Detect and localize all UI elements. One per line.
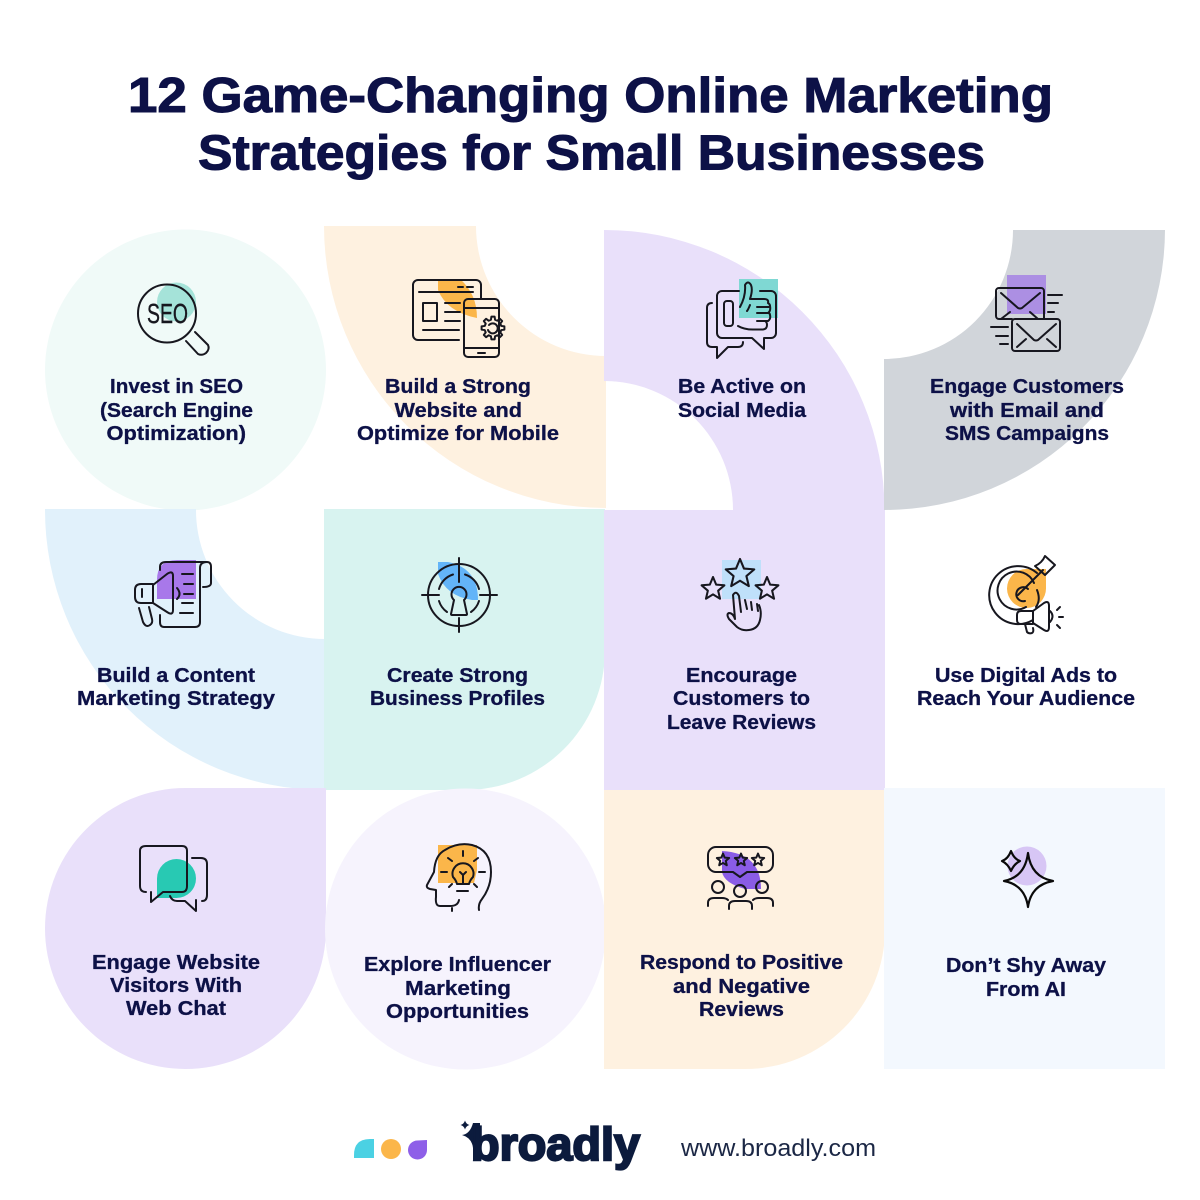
heading: Respond to Reviews: Reviews bbox=[699, 999, 784, 1021]
heading: Be Active on Social Media: Be Active on bbox=[678, 376, 806, 398]
heading: Engage Customers: Engage Customers bbox=[930, 376, 1124, 398]
heading: Build a Strong Website: Website and bbox=[394, 400, 522, 422]
heading: Encourage Customers: Customers to bbox=[673, 688, 810, 710]
heading: Engage Website bbox=[92, 952, 260, 1020]
footer: website url: www.broadly.com bbox=[680, 1135, 876, 1162]
heading: Engage Customers: SMS Campaigns bbox=[945, 423, 1109, 445]
heading: Engage Website: Web Chat bbox=[126, 998, 226, 1020]
heading: Respond to Reviews bbox=[640, 952, 843, 1021]
heading: Build a Strong Website bbox=[357, 376, 559, 445]
heading: Engage Website: Engage Website bbox=[92, 952, 260, 974]
heading: Invest in SEO: (Search Engine bbox=[100, 400, 253, 422]
panel: Be Active on Social Media bbox=[604, 230, 884, 510]
heading: Use Digital Ads: Use Digital Ads to bbox=[935, 665, 1117, 687]
title bbox=[128, 68, 1053, 180]
heading: Encourage Customers: Leave Reviews bbox=[667, 712, 816, 734]
heading: Explore Influencer: Explore Influencer bbox=[364, 954, 551, 976]
title: Strategies for Small Businesses bbox=[198, 126, 985, 180]
heading: Don't Shy Away bbox=[946, 955, 1107, 1001]
icon: keyhole target bbox=[422, 558, 497, 632]
icon: social thumbs up bbox=[707, 279, 778, 358]
icon: website and mobile bbox=[413, 279, 504, 357]
panel: Invest in SEO bbox=[45, 230, 326, 510]
heading: Build a Strong Website: Build a Strong bbox=[385, 376, 531, 398]
heading: Create Strong: Business Profiles bbox=[370, 688, 545, 710]
heading: Encourage Customers bbox=[667, 665, 816, 734]
heading: Invest in SEO bbox=[100, 376, 253, 445]
icon: SEO magnifier: SEO bbox=[147, 298, 188, 329]
panel: Engage Customers with Email and SMS bbox=[884, 230, 1165, 510]
heading: Invest in SEO: Optimization) bbox=[106, 423, 246, 445]
icon: reviews and people bbox=[708, 847, 773, 909]
icon: AI sparkles bbox=[1002, 846, 1053, 907]
heading: Explore Influencer: Opportunities bbox=[386, 1001, 529, 1023]
heading: Use Digital Ads bbox=[917, 665, 1135, 710]
icon: head with light bulb bbox=[427, 844, 491, 911]
heading: Don't Shy Away: Don’t Shy Away bbox=[946, 955, 1107, 977]
icon: megaphone and document bbox=[135, 560, 211, 627]
heading: Build a Content bbox=[77, 665, 276, 710]
panel: Use Digital Ads bbox=[917, 556, 1135, 710]
heading: Create Strong bbox=[370, 665, 545, 710]
heading: Build a Content: Marketing Strategy bbox=[77, 688, 276, 710]
panel: Encourage Customers to Leave Reviews bbox=[604, 510, 885, 790]
footer: broadly logo: broadly bbox=[471, 1118, 640, 1170]
heading: Invest in SEO: Invest in SEO bbox=[110, 376, 243, 398]
panel: Respond to Reviews bbox=[604, 790, 885, 1069]
heading: Don't Shy Away: From AI bbox=[986, 979, 1066, 1001]
panel: Explore Influencer Marketing bbox=[325, 788, 606, 1070]
panel: Build a Content Marketing Strategy bbox=[45, 509, 325, 790]
icon: web chat bubbles bbox=[140, 846, 207, 911]
panel: Create Strong Business Profiles bbox=[324, 509, 605, 790]
heading: Build a Strong Website: Optimize for Mobile bbox=[357, 423, 559, 445]
panel: Engage Website Visitors bbox=[45, 788, 326, 1069]
heading: Be Active on Social Media: Social Media bbox=[678, 400, 807, 422]
panel: Build a Strong Website bbox=[324, 226, 606, 508]
icon: SEO magnifier bbox=[138, 282, 209, 355]
heading: Explore Influencer bbox=[364, 954, 551, 1023]
icon: target and megaphone bbox=[989, 556, 1063, 633]
heading: Explore Influencer: Marketing bbox=[405, 978, 511, 1000]
icon: stars and hand bbox=[702, 559, 778, 630]
title: 12 Game-Changing Online Marketing bbox=[128, 68, 1053, 123]
heading: Be Active on Social Media bbox=[678, 376, 807, 422]
icon: email envelopes bbox=[991, 275, 1062, 351]
heading: Engage Customers bbox=[930, 376, 1124, 445]
heading: Engage Customers: with Email and bbox=[949, 400, 1104, 422]
panel: Don't Shy Away From AI bbox=[884, 788, 1165, 1069]
heading: Respond to Reviews: and Negative bbox=[673, 976, 810, 998]
heading: Build a Content: Build a Content bbox=[97, 665, 255, 687]
heading: Respond to Reviews: Respond to Positive bbox=[640, 952, 843, 974]
footer: brand marks bbox=[354, 1139, 427, 1160]
heading: Engage Website: Visitors With bbox=[110, 975, 242, 997]
heading: Create Strong: Create Strong bbox=[387, 665, 528, 687]
heading: Use Digital Ads: Reach Your Audience bbox=[917, 688, 1135, 710]
heading: Encourage Customers: Encourage bbox=[686, 665, 797, 687]
